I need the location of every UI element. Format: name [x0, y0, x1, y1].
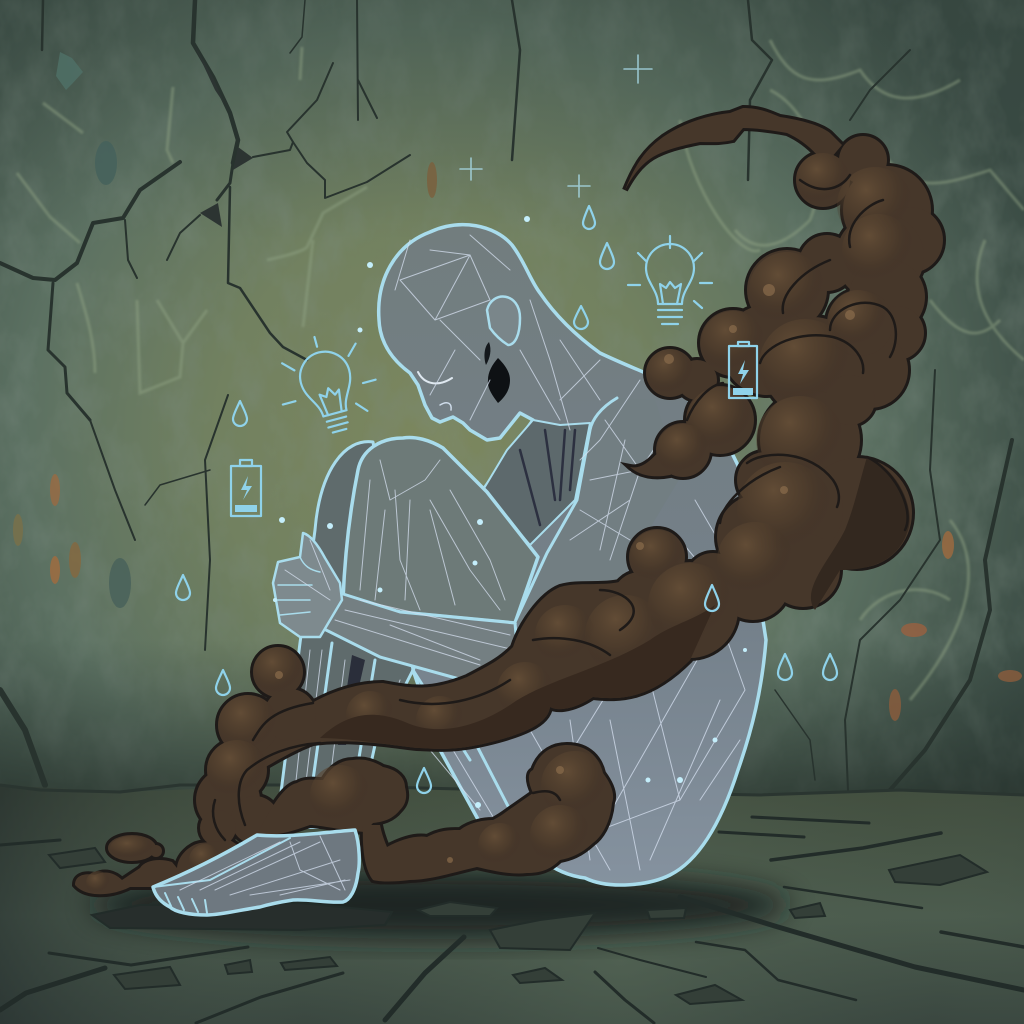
far leg	[262, 442, 413, 828]
forearm	[320, 593, 520, 680]
icon: battery right	[729, 342, 757, 398]
interior leg line	[413, 670, 510, 810]
glowing particles	[273, 216, 747, 808]
floor cracks	[0, 817, 1024, 1023]
smoke band shadow	[320, 605, 715, 749]
clasped hand	[273, 533, 342, 637]
smoke body	[75, 108, 943, 894]
wall background	[0, 0, 1024, 800]
icon: tear drops	[176, 206, 837, 793]
finger lines	[277, 557, 320, 615]
cheek sliver	[484, 342, 490, 365]
smoke right-side shadow	[811, 457, 910, 610]
foot in front of smoke	[153, 830, 359, 915]
face hole	[488, 358, 510, 403]
smoke highlights	[275, 284, 855, 863]
wall cracks	[0, 0, 1012, 790]
toes	[153, 838, 290, 913]
floating icons	[176, 206, 837, 793]
upper arm edge	[515, 398, 617, 622]
seated figure	[262, 225, 766, 885]
icon: light bulb left	[268, 325, 386, 443]
sparkles	[460, 55, 652, 197]
ear	[487, 297, 520, 345]
chest streaks	[520, 430, 575, 525]
closed eye	[418, 372, 452, 383]
floor stones	[49, 848, 987, 1004]
web lines on body	[285, 235, 755, 870]
foot web lines	[180, 836, 350, 895]
nostril	[440, 403, 451, 410]
foot shape	[153, 830, 359, 915]
upper arm fill	[515, 398, 680, 650]
wall stains	[13, 52, 1022, 721]
pale wall veins	[17, 40, 1024, 700]
smoke fold lines	[213, 175, 908, 840]
floor	[0, 785, 1024, 1024]
head, neck and torso	[379, 225, 766, 885]
icon: light bulb right	[628, 236, 712, 324]
thigh and knee	[343, 437, 538, 623]
crack junction holes	[193, 43, 253, 227]
smoke silhouette outline	[75, 108, 943, 894]
icon: battery left	[231, 460, 261, 516]
chest wedge	[483, 420, 590, 545]
smoke lobes shading	[86, 153, 914, 895]
ground shadow	[90, 871, 790, 939]
far shin lines	[313, 643, 375, 780]
